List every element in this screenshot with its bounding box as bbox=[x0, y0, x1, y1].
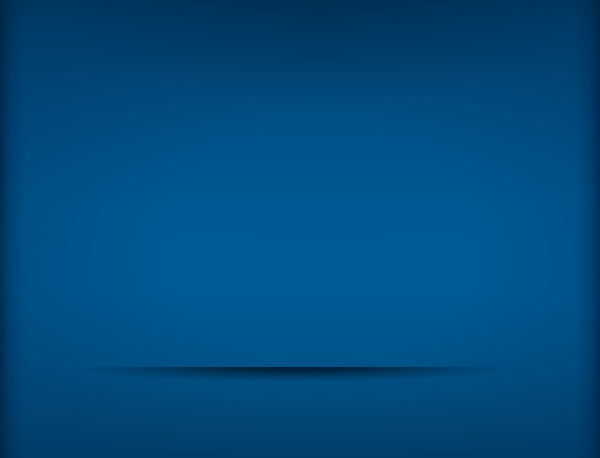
background: top centre shade bbox=[0, 0, 600, 130]
floor shadow bbox=[95, 367, 496, 380]
background: right edge vignette bbox=[574, 0, 600, 458]
background: left edge vignette bbox=[0, 0, 26, 458]
